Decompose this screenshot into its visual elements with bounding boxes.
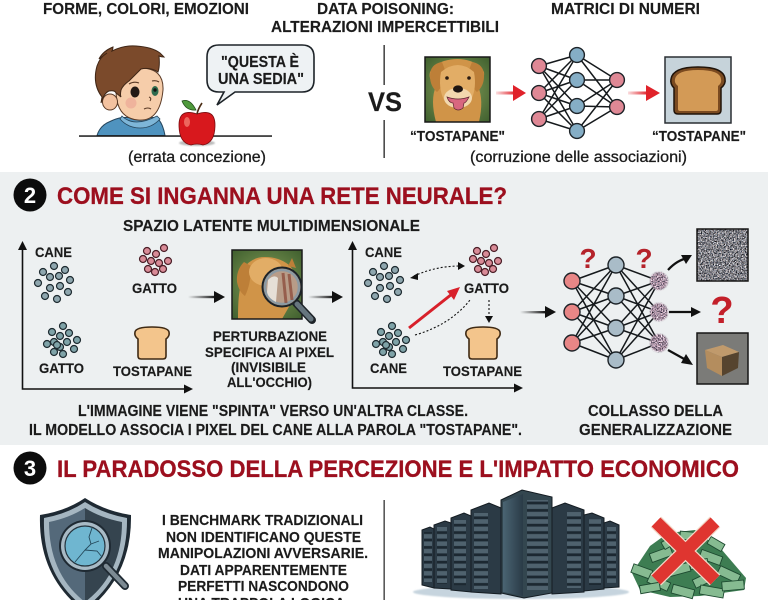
icon: grande punto interrogativo: ? <box>710 290 734 332</box>
caption: corruzione delle associazioni: (corruzione delle associazioni) <box>470 149 687 166</box>
heading: matrici di numeri: MATRICI DI NUMERI <box>551 1 700 18</box>
text: benchmark tradizionali: I BENCHMARK TRADIZIONALI <box>162 512 363 529</box>
arrow: verso rete <box>520 306 556 318</box>
panel: confronto percezione umana e macchina <box>0 0 768 172</box>
text: immagine spinta <box>29 403 522 439</box>
text: immagine spinta: IL MODELLO ASSOCIA I PIXEL DEL CANE ALLA PAROLA "TOSTAPANE". <box>29 422 522 439</box>
badge 3 <box>14 452 46 484</box>
callout: speech bubble <box>207 45 314 105</box>
divider bottom <box>384 120 385 158</box>
heading: data poisoning <box>271 1 499 36</box>
neural network 2 <box>564 257 668 368</box>
heading: forme, colori, emozioni: FORME, COLORI, EMOZIONI <box>43 1 249 18</box>
icon: data center <box>413 490 629 599</box>
panel: come si inganna una rete neurale <box>0 172 768 445</box>
subheading: spazio latente: SPAZIO LATENTE MULTIDIMENSIONALE <box>123 218 420 235</box>
badge 2: 2 <box>24 183 36 208</box>
chart: spazio latente prima: TOSTAPANE <box>113 363 192 379</box>
icon: banconote sbarrate <box>631 522 746 599</box>
image: fetta di pane tostato <box>665 57 731 123</box>
heading section 2: COME SI INGANNA UNA RETE NEURALE? <box>57 183 507 210</box>
chart: spazio latente dopo: CANE <box>370 360 407 376</box>
chart: spazio latente dopo: GATTO <box>464 280 509 296</box>
arrows: uscite della rete <box>668 255 701 365</box>
text: collasso della generalizzazione: GENERALIZZAZIONE <box>579 422 732 439</box>
image: cane <box>425 57 490 122</box>
heading: data poisoning: DATA POISONING: <box>317 1 454 18</box>
text: benchmark tradizionali <box>158 512 368 600</box>
image: cubo distorto <box>697 333 748 384</box>
badge 3: 3 <box>24 456 36 481</box>
text: perturbazione specifica <box>205 328 334 390</box>
chart: spazio latente prima: GATTO <box>39 360 84 376</box>
image: rumore <box>697 229 748 281</box>
text: benchmark tradizionali: DATI APPARENTEMENTE <box>180 562 347 579</box>
icon: punti interrogativi sulla rete <box>579 243 653 274</box>
heading: data poisoning: ALTERAZIONI IMPERCETTIBILI <box>271 19 499 36</box>
text: immagine spinta: L'IMMAGINE VIENE "SPINTA" VERSO UN'ALTRA CLASSE. <box>78 403 468 420</box>
text: perturbazione specifica: ALL'OCCHIO) <box>227 374 312 390</box>
text: benchmark tradizionali: PERFETTI NASCONDONO <box>178 578 349 595</box>
label: tostapane sinistra: “TOSTAPANE" <box>410 129 505 145</box>
icon: scudo con lente incrinata <box>40 498 131 600</box>
neural network 1 <box>532 48 624 138</box>
divider top <box>384 45 385 85</box>
chart: spazio latente dopo: CANE <box>365 244 402 260</box>
panel: paradosso della percezione <box>0 445 768 600</box>
badge 2 <box>14 178 46 212</box>
text: collasso della generalizzazione <box>579 403 732 439</box>
arrow: rosso 2 <box>628 85 660 101</box>
arrow: verso perturbazione <box>188 291 225 303</box>
chart: spazio latente dopo: TOSTAPANE <box>443 363 522 379</box>
illustration: mela <box>179 100 215 146</box>
text: perturbazione specifica: SPECIFICA AI PIXEL <box>205 344 334 360</box>
callout: speech bubble: "QUESTA È <box>221 54 299 71</box>
divider section 3 <box>384 500 385 600</box>
text: perturbazione specifica: (INVISIBILE <box>231 359 306 375</box>
icon: punti interrogativi sulla rete: ? <box>579 243 597 274</box>
text: benchmark tradizionali: MANIPOLAZIONI AVVERSARIE. <box>158 545 368 562</box>
chart: spazio latente prima <box>18 241 193 394</box>
chart: spazio latente prima: CANE <box>35 244 72 260</box>
icon: punti interrogativi sulla rete: ? <box>635 243 653 274</box>
image: cane con lente <box>232 250 312 320</box>
VS label: VS <box>368 87 402 117</box>
table line <box>79 135 272 137</box>
arrow: rosso 1 <box>496 85 526 101</box>
caption: errata concezione: (errata concezione) <box>128 149 266 166</box>
text: perturbazione specifica: PERTURBAZIONE <box>213 328 327 344</box>
chart: spazio latente prima: GATTO <box>132 280 177 296</box>
text: collasso della generalizzazione: COLLASSO DELLA <box>588 403 723 420</box>
chart: spazio latente dopo <box>348 241 523 392</box>
arrow: verso spazio latente dopo <box>308 291 343 303</box>
callout: speech bubble: UNA SEDIA" <box>218 71 304 88</box>
text: benchmark tradizionali: NON IDENTIFICANO QUESTE <box>166 529 361 546</box>
illustration: bambino <box>95 46 165 135</box>
label: tostapane destra: “TOSTAPANE" <box>652 129 746 145</box>
